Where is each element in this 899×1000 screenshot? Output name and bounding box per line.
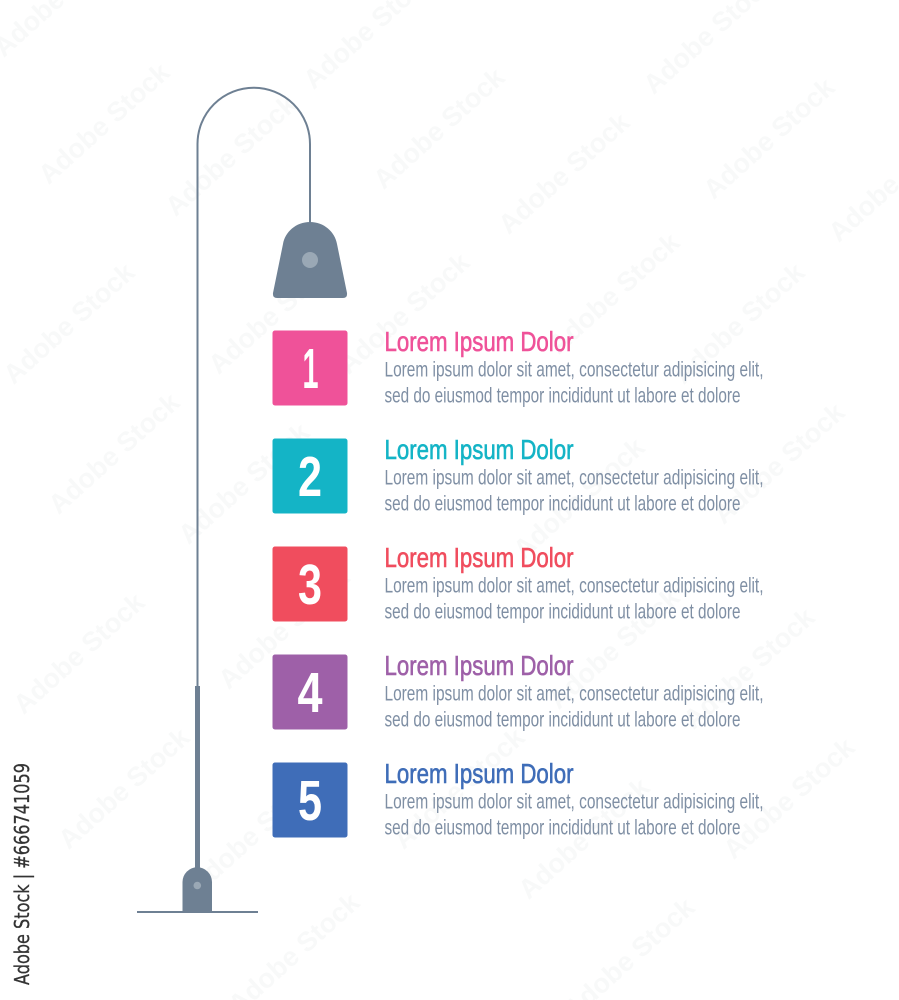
watermark pattern: Adobe Stock xyxy=(388,721,531,855)
watermark pattern: Adobe Stock xyxy=(698,71,841,205)
body 4: Lorem ipsum dolor sit amet, consectetur adipisicing elit, xyxy=(384,682,764,706)
item 2 xyxy=(272,434,764,516)
heading 5: Lorem Ipsum Dolor xyxy=(384,758,574,789)
number 2: 2 xyxy=(298,445,322,509)
watermark pattern: Adobe Stock xyxy=(543,226,686,360)
number box 3 xyxy=(272,546,348,622)
heading 1: Lorem Ipsum Dolor xyxy=(384,326,574,357)
number box 5 xyxy=(272,762,348,838)
number 5: 5 xyxy=(298,769,322,833)
watermark pattern: Adobe Stock xyxy=(543,581,686,715)
number box 4 xyxy=(272,654,348,730)
watermark pattern: Adobe Stock xyxy=(678,601,821,735)
body 3: sed do eiusmod tempor incididunt ut labore et dolore xyxy=(384,600,740,624)
watermark pattern: Adobe Stock xyxy=(333,246,476,380)
heading 2: Lorem Ipsum Dolor xyxy=(384,434,574,465)
number 1: 1 xyxy=(302,337,318,401)
watermark pattern: Adobe Stock xyxy=(173,416,316,550)
lamp bulb xyxy=(302,252,318,268)
number box 2 xyxy=(272,438,348,514)
body 1: sed do eiusmod tempor incididunt ut labore et dolore xyxy=(384,384,740,408)
base dot xyxy=(194,882,201,889)
watermark pattern: Adobe Stock xyxy=(708,396,851,530)
watermark pattern: Adobe Stock xyxy=(53,721,196,855)
watermark pattern: Adobe Stock xyxy=(43,386,186,520)
body 5: sed do eiusmod tempor incididunt ut labore et dolore xyxy=(384,816,740,840)
watermark pattern: Adobe Stock xyxy=(33,56,176,190)
item 3 xyxy=(272,542,764,624)
side credit: Adobe Stock | #666741059 xyxy=(10,763,34,985)
body 2: Lorem ipsum dolor sit amet, consectetur adipisicing elit, xyxy=(384,466,764,490)
body 3: Lorem ipsum dolor sit amet, consectetur adipisicing elit, xyxy=(384,574,764,598)
watermark pattern: Adobe Stock xyxy=(493,106,636,240)
watermark pattern: Adobe Stock xyxy=(668,256,811,390)
watermark pattern: Adobe Stock xyxy=(203,246,346,380)
watermark pattern: Adobe Stock xyxy=(8,586,151,720)
watermark pattern: Adobe Stock xyxy=(213,561,356,695)
watermark pattern: Adobe Stock xyxy=(508,431,651,565)
watermark pattern: Adobe Stock xyxy=(718,731,861,865)
number 3: 3 xyxy=(298,553,322,617)
item 5 xyxy=(272,758,764,840)
ground line xyxy=(137,911,258,913)
lamp shade xyxy=(273,222,347,298)
lamp pole xyxy=(195,686,200,870)
watermark pattern: Adobe Stock xyxy=(160,88,303,222)
lamp base xyxy=(182,867,212,912)
watermark pattern: Adobe Stock xyxy=(368,61,511,195)
watermark pattern: Adobe Stock xyxy=(183,766,326,900)
body 1: Lorem ipsum dolor sit amet, consectetur adipisicing elit, xyxy=(384,358,764,382)
body 2: sed do eiusmod tempor incididunt ut labore et dolore xyxy=(384,492,740,516)
number box 1 xyxy=(272,330,348,406)
watermark pattern: Adobe Stock xyxy=(513,771,656,905)
lamp illustration xyxy=(137,88,347,913)
body 4: sed do eiusmod tempor incididunt ut labore et dolore xyxy=(384,708,740,732)
lamp arm xyxy=(198,88,310,686)
watermark pattern: Adobe Stock xyxy=(0,256,141,390)
heading 4: Lorem Ipsum Dolor xyxy=(384,650,574,681)
body 5: Lorem ipsum dolor sit amet, consectetur adipisicing elit, xyxy=(384,790,764,814)
heading 3: Lorem Ipsum Dolor xyxy=(384,542,574,573)
item 1 xyxy=(272,326,764,408)
item 4 xyxy=(272,650,764,732)
number 4: 4 xyxy=(298,661,323,725)
